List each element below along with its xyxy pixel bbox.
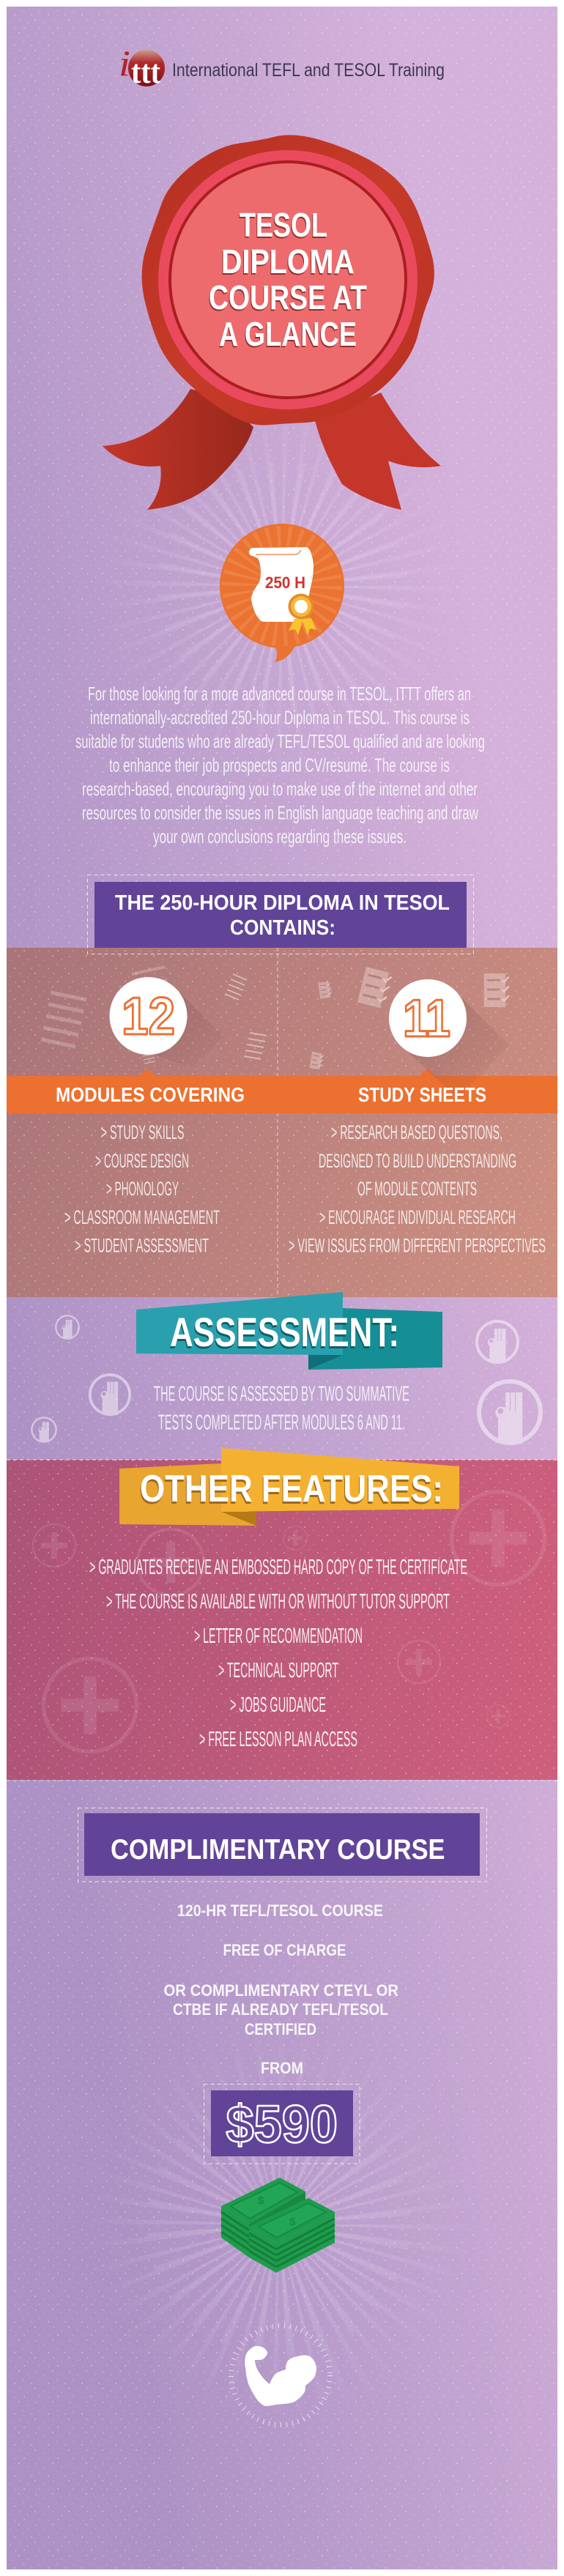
list: modules covering: > STUDENT ASSESSMENT — [75, 1235, 209, 1257]
heading: 250-hour diploma contains: CONTAINS: — [230, 916, 335, 940]
complimentary course details — [164, 1901, 398, 2077]
logo wordmark: International TEFL and TESOL Training — [172, 60, 445, 81]
logo letters: ttt — [131, 53, 161, 90]
list: modules covering — [64, 1121, 220, 1257]
list: modules covering: > COURSE DESIGN — [95, 1150, 189, 1172]
pink ring — [158, 150, 418, 409]
intro paragraph: your own conclusions regarding these issues. — [153, 825, 407, 847]
icons: OK hands — [31, 1315, 541, 1444]
wax edge — [142, 135, 434, 426]
stat: 12 modules: 12 — [122, 987, 175, 1046]
icon: money stacks — [221, 2178, 335, 2273]
list: modules covering: > STUDY SKILLS — [101, 1121, 185, 1143]
faint sheet icons, right column — [309, 967, 509, 1070]
heading: complimentary course — [78, 1808, 486, 1882]
seal badge — [103, 135, 441, 510]
inner disc — [170, 162, 406, 398]
note edges — [221, 2212, 335, 2267]
stat: 11 study sheets — [389, 979, 467, 1057]
long shadows of number discs — [121, 989, 509, 1099]
heading: 250-hour diploma contains: THE 250-HOUR DIPLOMA IN TESOL — [115, 891, 450, 915]
250 H label: 250 H — [265, 574, 305, 592]
sunburst rays behind money — [182, 2128, 375, 2321]
tick ring — [231, 2326, 330, 2424]
title: COURSE AT — [209, 278, 367, 316]
faint list icons, left column — [41, 967, 267, 1064]
bubble rays — [252, 556, 312, 616]
intro paragraph — [75, 683, 485, 847]
list: modules covering: > PHONOLOGY — [106, 1178, 179, 1200]
complimentary course details: CERTIFIED — [245, 2020, 316, 2038]
complimentary course details: CTBE IF ALREADY TEFL/TESOL — [173, 2000, 388, 2019]
back stack — [221, 2206, 249, 2257]
list: study sheets — [289, 1121, 546, 1257]
panel: other features background — [7, 1460, 557, 1781]
icon: money stacks: $ — [289, 2216, 296, 2228]
list: other features — [89, 1556, 467, 1751]
scroll fold — [256, 550, 301, 554]
scroll — [249, 547, 313, 622]
heading: complimentary course: COMPLIMENTARY COURSE — [111, 1834, 445, 1866]
sunburst rays behind scroll icon — [189, 493, 375, 679]
list: other features: > LETTER OF RECOMMENDATION — [194, 1625, 363, 1648]
right ribbon — [315, 393, 441, 510]
band labels: MODULES COVERING — [56, 1083, 245, 1106]
list: modules covering: > CLASSROOM MANAGEMENT — [64, 1206, 220, 1228]
stat: 12 modules — [110, 977, 188, 1055]
stat: 11 study sheets: 11 — [403, 990, 450, 1048]
icons: plus signs — [33, 1492, 544, 1751]
list: other features: > FREE LESSON PLAN ACCESS — [199, 1728, 357, 1751]
title — [209, 206, 367, 353]
title: DIPLOMA — [221, 242, 355, 281]
band labels: STUDY SHEETS — [358, 1083, 486, 1106]
assessment banner: ASSESSMENT: — [170, 1309, 399, 1355]
price box — [204, 2085, 360, 2164]
left ribbon — [103, 389, 253, 510]
orange band — [7, 1069, 557, 1113]
speech bubble — [220, 524, 344, 662]
list: other features: > TECHNICAL SUPPORT — [218, 1659, 338, 1682]
medal — [289, 593, 316, 635]
assessment banner — [136, 1292, 442, 1370]
icon: 250 hour certificate — [220, 524, 344, 662]
icon: flexed arm — [231, 2326, 330, 2424]
icon: money stacks: $ — [258, 2194, 264, 2207]
list: other features: > JOBS GUIDANCE — [230, 1693, 326, 1717]
logo ball — [128, 50, 165, 86]
title: A GLANCE — [219, 315, 357, 353]
band labels — [56, 1083, 486, 1106]
price box: $590 — [226, 2096, 338, 2154]
logo mark: i — [119, 42, 130, 83]
heading: 250-hour diploma contains — [88, 875, 473, 954]
complimentary course details: FREE OF CHARGE — [223, 1941, 346, 1959]
assessment text — [154, 1383, 409, 1434]
other features banner — [119, 1448, 459, 1526]
complimentary course details: 120-HR TEFL/TESOL COURSE — [177, 1901, 383, 1920]
panel: course contents background — [7, 948, 557, 1297]
front stack — [249, 2227, 276, 2273]
complimentary course details: FROM — [261, 2059, 303, 2077]
complimentary course details: OR COMPLIMENTARY CTEYL OR — [164, 1981, 398, 2000]
title: TESOL — [240, 206, 327, 244]
arm — [245, 2346, 316, 2406]
logo — [119, 42, 445, 90]
other features banner: OTHER FEATURES: — [140, 1468, 443, 1510]
